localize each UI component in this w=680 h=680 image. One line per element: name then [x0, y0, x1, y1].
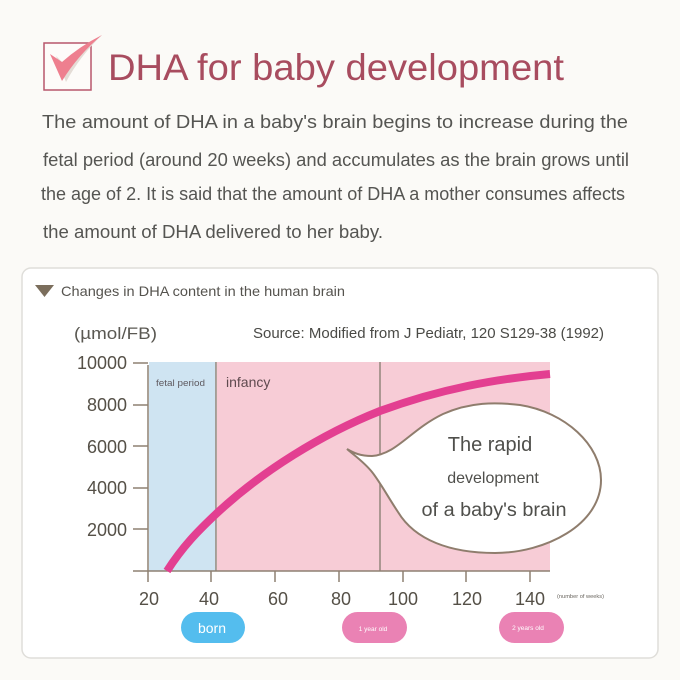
y axis labels: 6000 [87, 437, 127, 457]
y axis labels: 4000 [87, 478, 127, 498]
panel heading: Changes in DHA content in the human brain [61, 283, 345, 299]
x axis labels: 40 [199, 589, 219, 609]
y axis labels: 2000 [87, 520, 127, 540]
x axis labels: 140 [515, 589, 545, 609]
region label: infancy: infancy [226, 374, 270, 390]
x axis labels: 20 [139, 589, 159, 609]
y axis unit: (µmol/FB) [74, 324, 157, 343]
y axis labels: 10000 [77, 353, 127, 373]
y axis labels: 8000 [87, 395, 127, 415]
intro text: The amount of DHA in a baby's brain begins to increase during the [42, 112, 628, 132]
x axis labels: 120 [452, 589, 482, 609]
pill: 2 years old: 2 years old [512, 625, 544, 632]
intro text: fetal period (around 20 weeks) and accumulates as the brain grows until [43, 150, 629, 170]
y axis labels [77, 353, 127, 540]
x axis labels: 80 [331, 589, 351, 609]
panel: chart card [22, 268, 658, 658]
chart: DHA curve [77, 353, 604, 609]
callout: rapid development: The rapid [448, 434, 532, 456]
icon: checked box [44, 35, 102, 90]
x axis unit: (number of weeks) [557, 594, 604, 600]
intro text: the age of 2. It is said that the amount of DHA a mother consumes affects [41, 184, 625, 204]
callout: rapid development [347, 403, 601, 553]
pill: born [181, 612, 245, 643]
callout: rapid development: of a baby's brain [422, 500, 566, 521]
pill: 1 year old: 1 year old [359, 626, 388, 633]
intro text: the amount of DHA delivered to her baby. [43, 222, 383, 242]
source note: Source: Modified from J Pediatr, 120 S129-38 (1992) [253, 326, 604, 342]
callout: rapid development: development [447, 470, 539, 487]
intro text [41, 112, 629, 242]
x axis labels [139, 589, 545, 609]
pill: born: born [198, 620, 226, 636]
x axis labels: 100 [388, 589, 418, 609]
region label: fetal period: fetal period [156, 378, 205, 389]
pill: 2 years old [499, 612, 564, 643]
title: DHA for baby development [108, 47, 565, 88]
pill: 1 year old [342, 612, 407, 643]
x axis labels: 60 [268, 589, 288, 609]
